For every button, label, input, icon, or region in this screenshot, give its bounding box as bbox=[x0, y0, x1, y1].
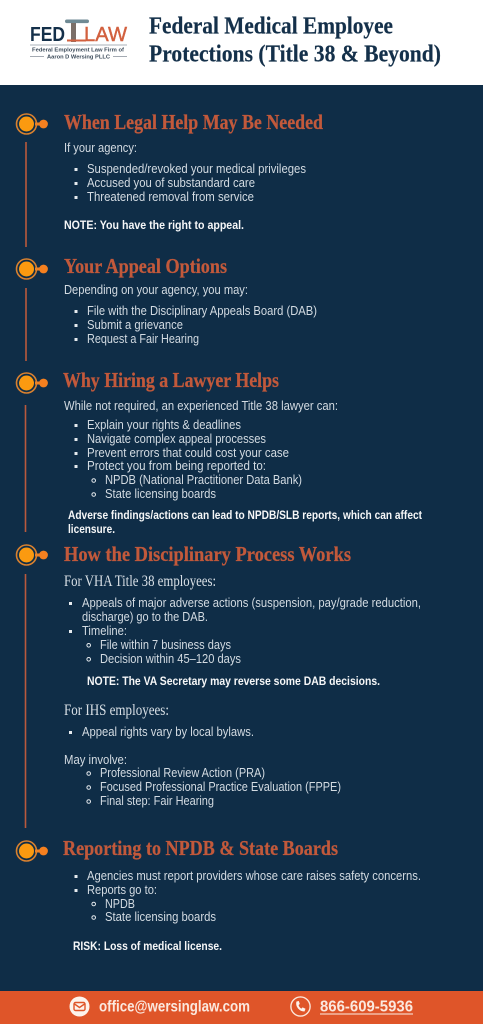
icon: timeline node 4 bbox=[16, 545, 48, 565]
timeline line 1 bbox=[25, 142, 27, 247]
icon: phone bbox=[291, 997, 310, 1016]
heading 2: Your Appeal Options bbox=[64, 254, 227, 278]
bullet list 5: Agencies must report providers whose care raises safety concerns. bbox=[87, 869, 421, 883]
bullet list 5: Reports go to: bbox=[87, 883, 157, 897]
subheading: VHA: For VHA Title 38 employees: bbox=[64, 573, 216, 590]
title: Federal Medical Employee bbox=[149, 14, 393, 40]
intro text 3: While not required, an experienced Title 38 lawyer can: bbox=[64, 399, 338, 413]
risk note: RISK: Loss of medical license. bbox=[73, 940, 222, 953]
footer band bbox=[0, 991, 483, 1024]
logo: FedLaw: FED bbox=[30, 24, 65, 46]
bullet list: VHA: Timeline: bbox=[82, 624, 127, 638]
timeline line 3 bbox=[25, 405, 26, 532]
section: When Legal Help May Be Needed bbox=[16, 110, 323, 247]
section: Reporting to NPDB & State Boards bbox=[16, 836, 421, 953]
note 3: Adverse findings/actions can lead to NPDB/SLB reports, which can affect bbox=[68, 509, 422, 522]
bullet list 3 bbox=[74, 418, 302, 501]
section: Why Hiring a Lawyer Helps bbox=[16, 368, 422, 536]
timeline line 4 bbox=[25, 574, 26, 828]
heading 4: How the Disciplinary Process Works bbox=[64, 542, 351, 566]
intro text 1: If your agency: bbox=[64, 141, 137, 155]
logo: FedLaw: LAW bbox=[84, 24, 127, 46]
sub list: May involve: Final step: Fair Hearing bbox=[100, 794, 214, 808]
bullet list 2: Request a Fair Hearing bbox=[87, 332, 199, 346]
bullet list 3: Protect you from being reported to: bbox=[87, 459, 266, 473]
bullet list 3: NPDB (National Practitioner Data Bank) bbox=[105, 473, 302, 487]
title: Protections (Title 38 & Beyond) bbox=[149, 42, 441, 68]
icon: email bbox=[70, 996, 90, 1016]
header band bbox=[0, 0, 483, 85]
bullet list 2: File with the Disciplinary Appeals Board (DAB) bbox=[87, 304, 317, 318]
bullet list 1: Suspended/revoked your medical privileges bbox=[87, 162, 306, 176]
note 3 bbox=[68, 509, 422, 536]
section: How the Disciplinary Process Works bbox=[16, 542, 421, 828]
sub list: May involve: Focused Professional Practice Evaluation (FPPE) bbox=[100, 780, 341, 794]
note 1: NOTE: You have the right to appeal. bbox=[64, 219, 244, 232]
bullet list: VHA: Decision within 45–120 days bbox=[100, 652, 241, 666]
logo: FedLaw bbox=[30, 20, 127, 60]
bullet list 3: Navigate complex appeal processes bbox=[87, 432, 266, 446]
intro text 2: Depending on your agency, you may: bbox=[64, 283, 248, 297]
logo: FedLaw: Aaron D Wersing PLLC bbox=[47, 54, 110, 60]
footer email: office@wersinglaw.com bbox=[99, 998, 250, 1016]
bullet list 3: Explain your rights & deadlines bbox=[87, 418, 241, 432]
bullet list 5: State licensing boards bbox=[105, 910, 216, 924]
note 3: licensure. bbox=[68, 523, 115, 536]
heading 5: Reporting to NPDB & State Boards bbox=[63, 836, 338, 860]
bullet list: IHS: Appeal rights vary by local bylaws. bbox=[82, 725, 254, 739]
bullet list 2: Submit a grievance bbox=[87, 318, 183, 332]
timeline line 2 bbox=[25, 288, 27, 361]
bullet list 3: State licensing boards bbox=[105, 487, 216, 501]
sub list: May involve: Professional Review Action (PRA) bbox=[100, 766, 265, 780]
bullet list 1 bbox=[74, 162, 306, 204]
sub list: May involve bbox=[87, 766, 341, 808]
bullet list 2 bbox=[74, 304, 317, 346]
section: Your Appeal Options bbox=[16, 254, 317, 361]
bullet list: VHA: Appeals of major adverse actions (suspension, pay/grade reduction, bbox=[82, 596, 421, 610]
icon: timeline node 1 bbox=[16, 114, 48, 134]
logo: FedLaw: Federal Employment Law Firm of bbox=[32, 48, 124, 54]
title bbox=[149, 14, 441, 68]
note 4: NOTE: The VA Secretary may reverse some DAB decisions. bbox=[87, 675, 380, 688]
bullet list: VHA: File within 7 business days bbox=[100, 638, 231, 652]
subheading: IHS: For IHS employees: bbox=[64, 702, 169, 719]
footer phone: 866-609-5936 bbox=[320, 998, 413, 1016]
heading 1: When Legal Help May Be Needed bbox=[64, 110, 323, 134]
icon: timeline node 3 bbox=[16, 373, 48, 393]
bullet list: VHA: discharge) go to the DAB. bbox=[82, 610, 208, 624]
heading 3: Why Hiring a Lawyer Helps bbox=[63, 368, 279, 392]
bullet list: VHA bbox=[69, 596, 421, 666]
bullet list 1: Threatened removal from service bbox=[87, 190, 254, 204]
icon: timeline node 2 bbox=[16, 259, 48, 279]
icon: timeline node 5 bbox=[16, 841, 48, 861]
text: May involve: May involve: bbox=[64, 753, 127, 767]
bullet list 5 bbox=[74, 869, 421, 924]
bullet list 5: NPDB bbox=[105, 897, 135, 911]
bullet list 3: Prevent errors that could cost your case bbox=[87, 446, 289, 460]
bullet list 1: Accused you of substandard care bbox=[87, 176, 255, 190]
